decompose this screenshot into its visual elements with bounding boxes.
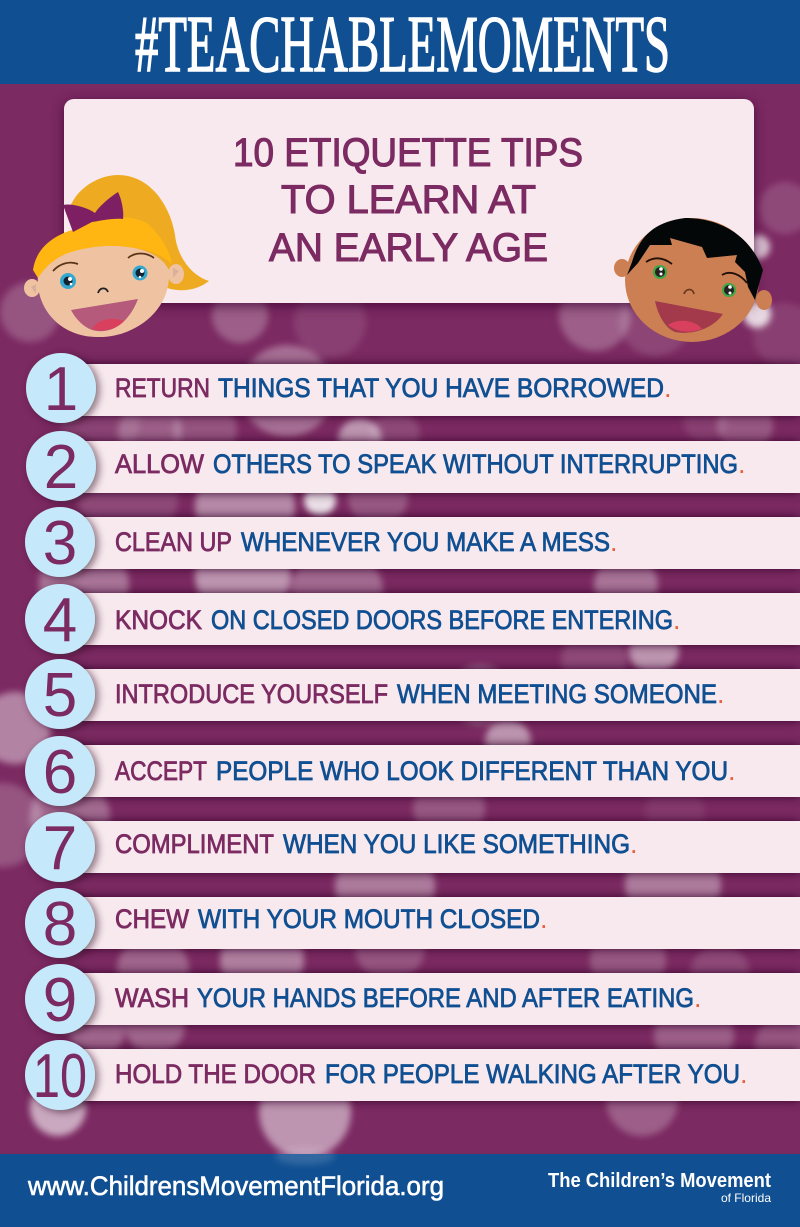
tip 7: [25, 812, 800, 883]
tip 2 text: .: [738, 449, 746, 479]
tip 5 text: [115, 679, 725, 709]
tip 9 text: YOUR HANDS BEFORE AND AFTER EATING: [197, 983, 694, 1013]
tip 7 text: COMPLIMENT: [115, 829, 274, 859]
number badge 3: [25, 507, 95, 578]
tip 10 text: HOLD THE DOOR: [115, 1059, 316, 1089]
tip 2 text: OTHERS TO SPEAK WITHOUT INTERRUPTING: [213, 449, 738, 479]
number badge 9: 9: [43, 966, 77, 1035]
tip 7 text: [115, 829, 638, 859]
tip 1 text: RETURN: [115, 373, 210, 403]
tip 7 text: .: [630, 829, 638, 859]
tip 3: [25, 507, 800, 578]
tip 10 text: [115, 1059, 748, 1089]
tip 3 text: [115, 527, 618, 557]
number badge 7: [25, 812, 95, 883]
tip 5 text: WHEN MEETING SOMEONE: [397, 679, 717, 709]
tip 1: [26, 353, 800, 424]
tip 4 text: .: [673, 605, 681, 635]
tip 9: [25, 964, 800, 1035]
tip 5 text: .: [717, 679, 725, 709]
icon: boy face: [614, 218, 772, 342]
number badge 7: 7: [43, 814, 77, 883]
number badge 8: 8: [43, 890, 77, 959]
tip 8: [25, 888, 800, 959]
tip 9 text: .: [694, 983, 702, 1013]
tip 10 text: FOR PEOPLE WALKING AFTER YOU: [325, 1059, 740, 1089]
tip 6 text: ACCEPT: [115, 756, 207, 786]
tip 4 text: ON CLOSED DOORS BEFORE ENTERING: [211, 605, 673, 635]
tip 5 text: INTRODUCE YOURSELF: [115, 679, 388, 709]
footer logo wordmark: The Children’s Movement: [548, 1170, 771, 1192]
number badge 6: [25, 736, 95, 807]
tip 10: [25, 1040, 800, 1111]
tip 8 text: .: [540, 904, 548, 934]
tip 4 text: KNOCK: [115, 605, 202, 635]
tip 1 text: THINGS THAT YOU HAVE BORROWED: [218, 373, 664, 403]
footer logo wordmark: [548, 1170, 771, 1205]
number badge 6: 6: [43, 738, 77, 807]
headline text: 10 ETIQUETTE TIPS: [233, 131, 583, 175]
number badge 5: [25, 659, 95, 730]
headline text: [233, 131, 583, 270]
tip 3 text: .: [610, 527, 618, 557]
panel: headline card: [64, 99, 754, 303]
tip 2: [26, 431, 800, 502]
tip 1 text: .: [664, 373, 672, 403]
number badge 1: [26, 353, 96, 424]
footer glow: [275, 1147, 335, 1165]
number badge 8: [25, 888, 95, 959]
number badge 2: 2: [44, 433, 78, 502]
number badge 2: [26, 431, 96, 502]
tip 4: [25, 584, 800, 655]
tip 6 text: .: [728, 756, 736, 786]
tip 9 text: WASH: [115, 983, 189, 1013]
tip 3 text: WHENEVER YOU MAKE A MESS: [241, 527, 610, 557]
footer logo wordmark: of Florida: [721, 1191, 771, 1205]
number badge 10: 10: [33, 1042, 87, 1111]
number badge 5: 5: [43, 661, 77, 730]
number badge 1: 1: [44, 355, 78, 424]
number badge 3: 3: [43, 509, 77, 578]
tip 8 text: CHEW: [115, 904, 189, 934]
tip 2 text: ALLOW: [115, 449, 204, 479]
icon: girl face: [24, 175, 209, 337]
number badge 4: [25, 584, 95, 655]
bokeh lights: [0, 182, 800, 1158]
tip 5: [25, 659, 800, 730]
headline text: AN EARLY AGE: [269, 226, 548, 270]
headline text: TO LEARN AT: [281, 178, 536, 222]
tip 6: [25, 736, 800, 807]
tip 7 text: WHEN YOU LIKE SOMETHING: [283, 829, 630, 859]
tip 6 text: PEOPLE WHO LOOK DIFFERENT THAN YOU: [216, 756, 728, 786]
tip 8 text: WITH YOUR MOUTH CLOSED: [198, 904, 540, 934]
tip 3 text: CLEAN UP: [115, 527, 232, 557]
footer website url: www.ChildrensMovementFlorida.org: [27, 1171, 444, 1201]
tip 10 text: .: [740, 1059, 748, 1089]
number badge 9: [25, 964, 95, 1035]
header band: [0, 0, 800, 84]
number badge 4: 4: [43, 586, 77, 655]
footer band: [0, 1154, 800, 1227]
